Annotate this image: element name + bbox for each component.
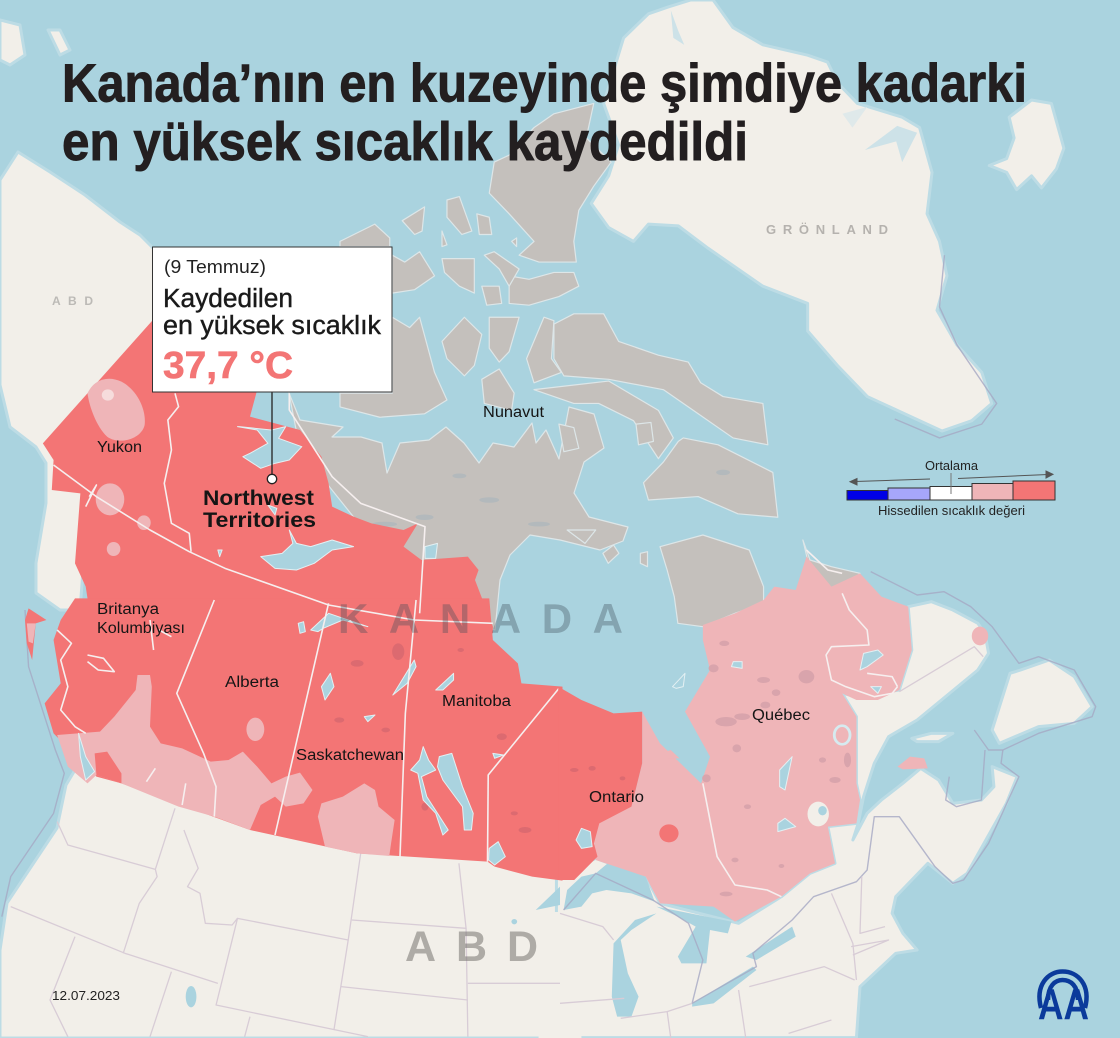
region label: Northwest Territories: Territories xyxy=(203,509,316,532)
red dot in Ontario xyxy=(659,824,679,842)
callout pointer xyxy=(267,392,277,484)
Newfoundland north patch xyxy=(972,627,988,645)
country label: Kanada: KANADA xyxy=(338,595,623,642)
legend bars xyxy=(847,481,1055,500)
pale patch: southern BC and Alberta xyxy=(57,675,312,830)
red pocket near coast xyxy=(95,752,121,783)
region label: Manitoba: Manitoba xyxy=(442,693,511,710)
callout date: (9 Temmuz) xyxy=(164,256,266,277)
region label: Ontario: Ontario xyxy=(589,789,644,806)
region label: Northwest Territories: Northwest xyxy=(203,487,314,510)
Haida Gwaii xyxy=(25,608,46,660)
provincial borders south xyxy=(177,600,559,862)
country label: Grönland: GRÖNLAND xyxy=(766,222,888,237)
pale patch: southern Saskatchewan xyxy=(318,783,395,856)
region label: Britanya Kolumbiyası xyxy=(97,601,185,637)
pale zone Québec xyxy=(592,557,912,922)
Arctic archipelago xyxy=(340,103,778,527)
lakes of the prairies xyxy=(298,613,505,865)
lakes and borders of the territories xyxy=(54,393,493,623)
logo: Anadolu Agency: AA xyxy=(1038,980,1089,1029)
legend heading: Ortalama xyxy=(925,458,979,473)
land: Greenland and Arctic island xyxy=(591,0,1064,438)
territorial borders xyxy=(54,393,493,623)
dark lake dots xyxy=(334,643,531,833)
coastal fjords xyxy=(57,620,186,805)
region label: Québec: Québec xyxy=(752,707,810,724)
land: western United States xyxy=(0,770,640,1038)
callout box xyxy=(152,247,392,392)
title: en yüksek sıcaklık kaydedildi xyxy=(62,112,748,172)
legend arrows xyxy=(850,471,1053,485)
Nunavut mainland xyxy=(289,393,628,630)
legend xyxy=(847,458,1055,518)
Gaspé patch xyxy=(897,757,928,769)
lakes of Québec and Ontario xyxy=(576,650,883,848)
Great Lakes xyxy=(564,858,796,1017)
tundra lake tints xyxy=(372,470,730,527)
red zone Ontario xyxy=(558,687,642,880)
Great Bear Lake xyxy=(237,427,302,468)
region label: Alberta: Alberta xyxy=(225,674,279,691)
callout heading xyxy=(163,285,381,340)
region label: Britanya Kolumbiyası: Britanya xyxy=(97,601,159,618)
region label: Nunavut: Nunavut xyxy=(483,404,545,421)
US state borders xyxy=(2,610,560,1037)
pale patch: Alberta dot xyxy=(246,718,264,741)
northern Québec grey area xyxy=(567,530,860,627)
pale patches in Yukon xyxy=(87,379,151,556)
callout value: 37,7 °C xyxy=(163,345,293,387)
callout heading: en yüksek sıcaklık xyxy=(163,312,381,340)
legend caption: Hissedilen sıcaklık değeri xyxy=(878,503,1025,518)
title: Kanada’nın en kuzeyinde şimdiye kadarki xyxy=(62,54,1027,114)
region label: Britanya Kolumbiyası: Kolumbiyası xyxy=(97,620,185,637)
date: 12.07.2023 xyxy=(52,988,120,1003)
land: eastern North America xyxy=(539,572,1096,1038)
country label: ABD northwest: A B D xyxy=(52,294,93,308)
region label: Saskatchewan: Saskatchewan xyxy=(296,747,404,764)
hole in Québec xyxy=(807,802,829,826)
Québec and Labrador borders xyxy=(703,550,897,897)
dark lake dots xyxy=(570,641,851,896)
region label: Northwest Territories xyxy=(203,487,316,532)
heat zone: southwestern Canada xyxy=(25,598,562,881)
land: Alaska and northwest islands xyxy=(0,20,155,610)
Great Slave Lake xyxy=(261,530,354,570)
title xyxy=(62,54,1027,172)
heat zone: northwestern Canada xyxy=(43,320,493,633)
James Bay island xyxy=(660,750,680,758)
heat zones: Ontario and Québec xyxy=(558,550,988,922)
region label: Yukon: Yukon xyxy=(97,439,142,456)
country label: ABD south: ABD xyxy=(405,923,538,971)
callout heading: Kaydedilen xyxy=(163,285,293,313)
